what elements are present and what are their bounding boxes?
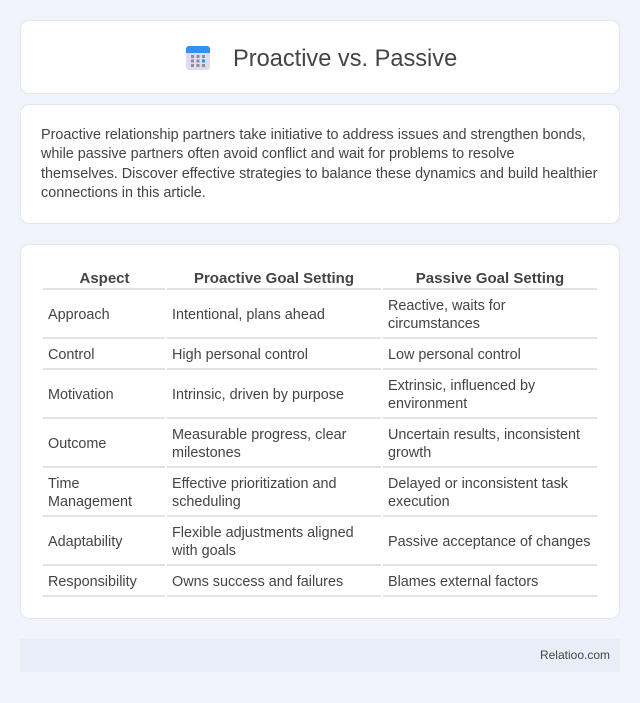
row: adaptability: Passive acceptance of changes bbox=[388, 534, 590, 550]
row: adaptability: Flexible adjustments aligned bbox=[172, 525, 354, 541]
row: time management: execution bbox=[388, 494, 450, 510]
row: motivation: Motivation bbox=[48, 387, 114, 403]
intro panel bbox=[20, 104, 620, 224]
table header: Passive Goal Setting bbox=[416, 270, 564, 287]
comparison table bbox=[43, 270, 597, 597]
intro text: connections in this article. bbox=[41, 185, 206, 201]
row: time management: scheduling bbox=[172, 494, 241, 510]
icon: calendar bbox=[186, 46, 210, 70]
row: motivation: Extrinsic, influenced by bbox=[388, 378, 535, 394]
row: responsibility: Blames external factors bbox=[388, 574, 538, 590]
row: approach bbox=[48, 298, 506, 332]
intro text: Proactive relationship partners take initiative to address issues and strengthen bonds, bbox=[41, 127, 586, 143]
row: time management: Effective prioritization and bbox=[172, 476, 337, 492]
table header: Proactive Goal Setting bbox=[194, 270, 354, 287]
row: time management: Time bbox=[48, 476, 79, 492]
table header: Aspect bbox=[79, 270, 130, 287]
intro text: themselves. Discover effective strategies to balance these dynamics and build healthier bbox=[41, 166, 597, 182]
header panel bbox=[20, 20, 620, 94]
row: outcome bbox=[48, 427, 580, 461]
row: control bbox=[48, 347, 521, 363]
row: motivation bbox=[48, 378, 536, 412]
row: motivation: Intrinsic, driven by purpose bbox=[172, 387, 344, 403]
row: control: High personal control bbox=[172, 347, 308, 363]
row: approach: Intentional, plans ahead bbox=[172, 307, 325, 323]
row: outcome: growth bbox=[388, 445, 431, 461]
footer text: Relatioo.com bbox=[540, 648, 610, 662]
row: control: Low personal control bbox=[388, 347, 521, 363]
intro text: while passive partners often avoid conflict and wait for problems to resolve bbox=[41, 146, 515, 162]
row: responsibility: Owns success and failures bbox=[172, 574, 343, 590]
row: time management: Delayed or inconsistent task bbox=[388, 476, 568, 492]
row: adaptability bbox=[48, 525, 590, 559]
row: time management bbox=[48, 476, 568, 510]
row: outcome: Outcome bbox=[48, 436, 106, 452]
row: approach: circumstances bbox=[388, 316, 480, 332]
intro text bbox=[41, 127, 598, 201]
footer bar bbox=[20, 639, 620, 672]
table header bbox=[79, 270, 564, 287]
row: control: Control bbox=[48, 347, 94, 363]
title: Proactive vs. Passive bbox=[233, 46, 457, 72]
row: outcome: Uncertain results, inconsistent bbox=[388, 427, 580, 443]
comparison table panel bbox=[20, 244, 620, 619]
row: outcome: milestones bbox=[172, 445, 241, 461]
row: motivation: environment bbox=[388, 396, 467, 412]
row: approach: Approach bbox=[48, 307, 110, 323]
row: approach: Reactive, waits for bbox=[388, 298, 506, 314]
row: outcome: Measurable progress, clear bbox=[172, 427, 346, 443]
row: adaptability: with goals bbox=[172, 543, 236, 559]
row: responsibility: Responsibility bbox=[48, 574, 137, 590]
row: time management: Management bbox=[48, 494, 132, 510]
row: adaptability: Adaptability bbox=[48, 534, 122, 550]
